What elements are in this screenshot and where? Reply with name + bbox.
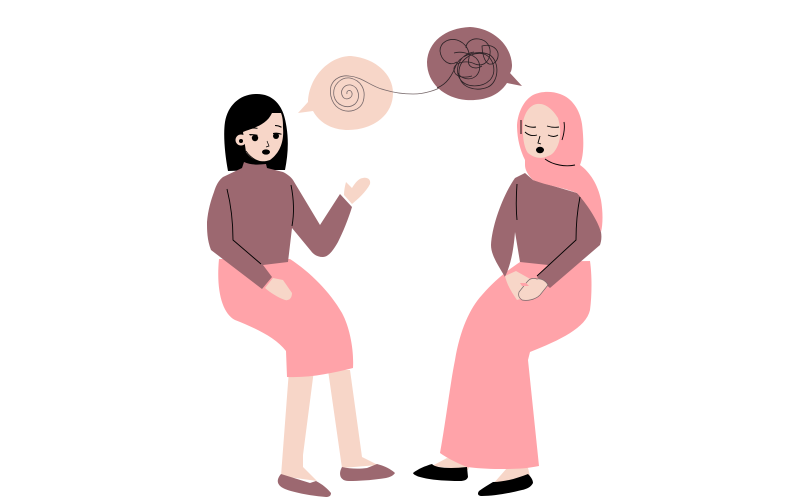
woman left: raised hand — [344, 178, 370, 204]
woman left: legs — [281, 370, 378, 481]
woman right: sweater — [491, 173, 601, 288]
woman right: long skirt — [440, 261, 592, 469]
woman left: lap hand — [265, 278, 292, 300]
woman left: sweater — [207, 162, 352, 289]
woman right: clasped hands — [505, 271, 548, 300]
woman left: face — [236, 113, 283, 162]
speech bubble: tangled thoughts — [427, 27, 522, 100]
closed eyes, brows and mouth — [521, 120, 575, 166]
woman left: hair — [224, 94, 288, 171]
woman right: feet — [432, 458, 530, 484]
woman right: shoes — [413, 464, 533, 496]
eyes and mouth — [239, 125, 282, 155]
woman left: shoes — [278, 464, 395, 497]
woman right: face — [521, 104, 575, 166]
woman left: skirt — [218, 259, 353, 377]
speech bubble: calm spiral — [298, 56, 445, 130]
woman right: hijab — [517, 92, 602, 232]
